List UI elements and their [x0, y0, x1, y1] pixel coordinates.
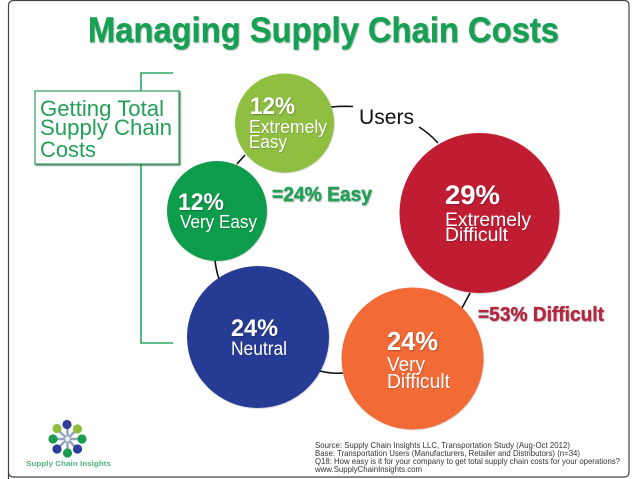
- circle: extremely easy: Easy: [249, 132, 287, 152]
- label: users: Users: [359, 106, 414, 129]
- circle: extremely difficult: 29%: [445, 180, 500, 210]
- circle: very difficult: [342, 288, 484, 430]
- bracket connector: [141, 73, 173, 343]
- circle: very easy: Very Easy: [180, 212, 257, 232]
- circle: very difficult: Very: [387, 354, 425, 376]
- circle: very difficult: 24%: [387, 326, 438, 356]
- source notes: Base: Transportation Users (Manufacturers, Retailer and Distributors) (n=34): [315, 448, 580, 458]
- circle: neutral: 24%: [231, 315, 278, 342]
- callout: 24% easy: =24% Easy: [272, 184, 373, 206]
- source notes: Source: Supply Chain Insights LLC, Transportation Study (Aug-Oct 2012): [315, 440, 570, 450]
- source notes: www.SupplyChainInsights.com: [314, 464, 422, 474]
- panel: getting total supply chain costs: Getting Total: [40, 96, 164, 121]
- connector lines between circles: [215, 106, 470, 373]
- circle: extremely difficult: Difficult: [445, 224, 509, 246]
- panel: getting total supply chain costs: Supply Chain: [40, 115, 172, 140]
- circle: extremely difficult: Extremely: [445, 209, 531, 231]
- circle: neutral: [187, 266, 329, 408]
- circle: extremely easy: [235, 74, 334, 172]
- callout: 53% difficult: =53% Difficult: [478, 304, 604, 326]
- icon: logo flower: [48, 420, 87, 458]
- circle: extremely easy: 12%: [250, 93, 295, 120]
- logo wordmark: Supply Chain Insights: [26, 459, 111, 468]
- logo: supply chain insights: [26, 420, 111, 468]
- title: Managing Supply Chain Costs: [88, 11, 559, 50]
- circle: very difficult: Difficult: [387, 371, 450, 393]
- panel: getting total supply chain costs: Costs: [40, 137, 96, 162]
- circle: extremely difficult: [400, 133, 560, 293]
- source notes: Q18: How easy is it for your company to get total supply chain costs for your operations?: [315, 456, 620, 466]
- circle: neutral: Neutral: [231, 339, 287, 360]
- panel: getting total supply chain costs: [35, 91, 179, 164]
- circle: very easy: [167, 161, 267, 261]
- circle: very easy: 12%: [178, 189, 224, 216]
- circle: extremely easy: Extremely: [249, 117, 327, 137]
